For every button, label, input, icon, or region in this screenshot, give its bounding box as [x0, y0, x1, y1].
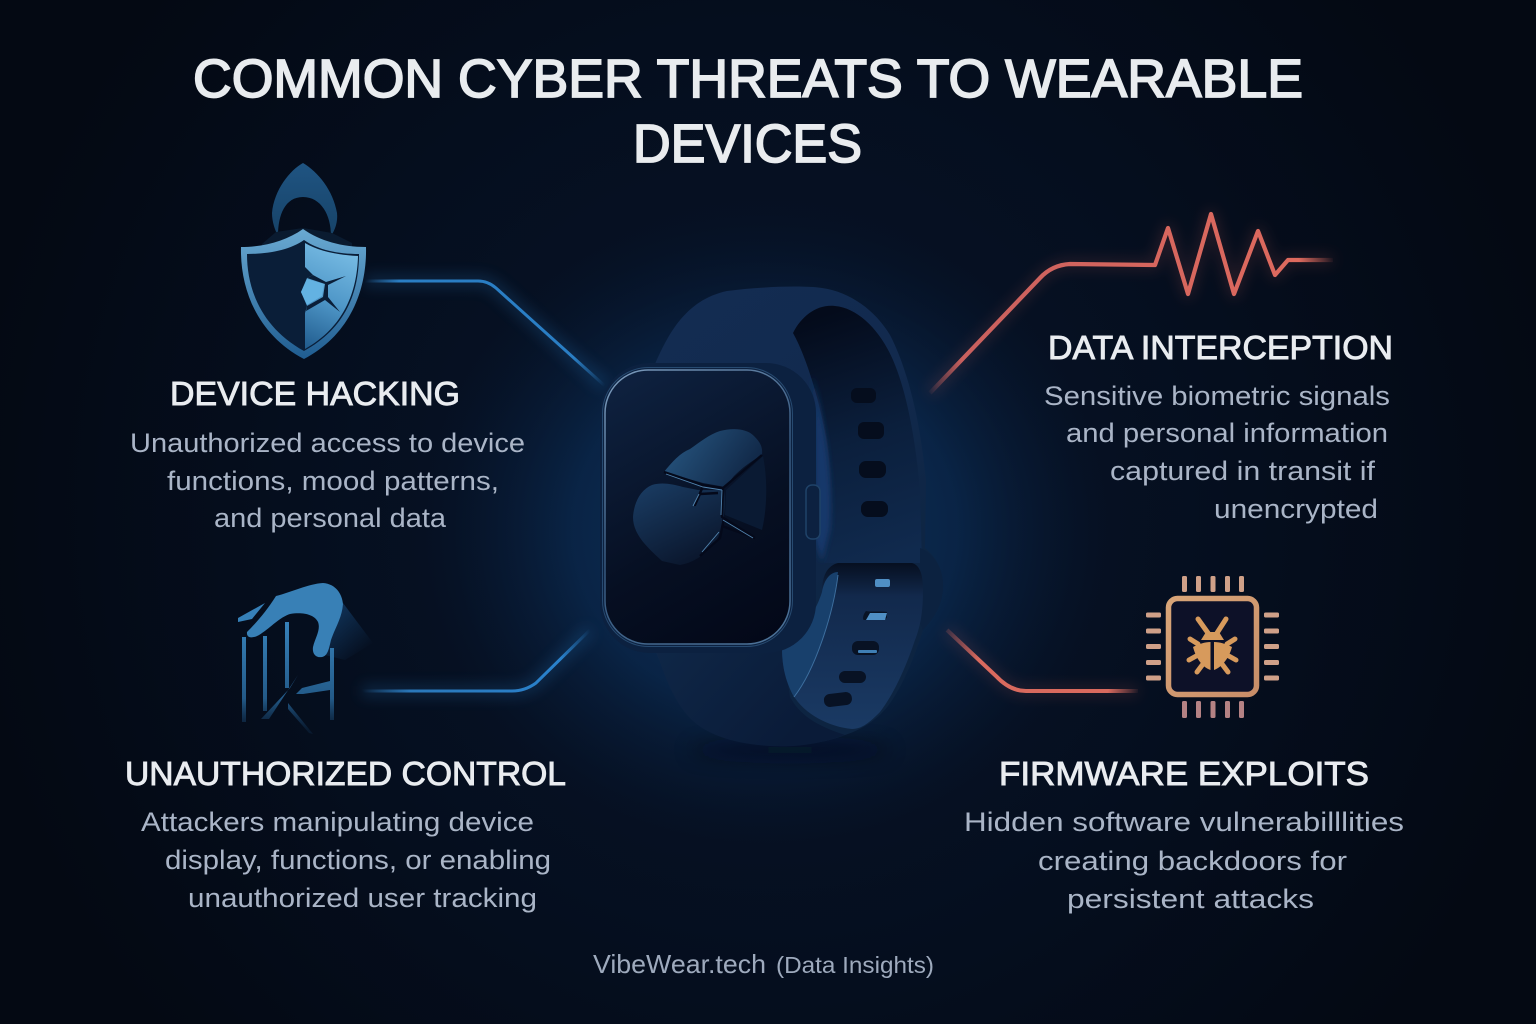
hand — [247, 583, 343, 657]
text: device hacking description — [130, 428, 525, 533]
text: data interception description: and personal information — [1066, 418, 1388, 448]
shield rim — [241, 229, 366, 359]
strap holes lower — [823, 579, 890, 708]
upper strap — [655, 287, 943, 746]
bug — [1189, 619, 1236, 672]
lower strap front — [782, 563, 923, 729]
heart right piece — [725, 456, 766, 530]
strings — [238, 603, 334, 734]
lower strap, left part — [655, 646, 845, 746]
cracks — [664, 455, 762, 556]
icon: hooded hacker and cracked shield — [241, 163, 366, 359]
heading: firmware exploits: FIRMWARE EXPLOITS — [999, 755, 1369, 792]
heading: unauthorized control: UNAUTHORIZED CONTROL — [125, 755, 566, 792]
inner strap shade — [793, 306, 922, 563]
heading: device hacking: DEVICE HACKING — [170, 375, 460, 412]
text: device hacking description: and personal data — [214, 503, 447, 533]
text: device hacking description: Unauthorized access to device — [130, 428, 525, 458]
crescent highlight beside case — [812, 375, 831, 562]
lit strip left of strap seam — [782, 572, 838, 697]
connector: data interception pulse line — [930, 214, 1333, 393]
title: DEVICES — [633, 114, 862, 174]
text: data interception description: captured in transit if — [1110, 456, 1376, 486]
right lug — [915, 548, 943, 630]
screen — [602, 368, 792, 646]
chip pins — [1146, 576, 1279, 718]
title: COMMON CYBER THREATS TO WEARABLE — [193, 49, 1303, 109]
text: firmware exploits description: Hidden software vulnerabilllities — [964, 807, 1404, 837]
footer credit — [593, 949, 934, 979]
text: unauthorized control description: display, functions, or enabling — [165, 845, 551, 875]
cracked heart on screen — [633, 429, 766, 565]
text: firmware exploits description — [964, 807, 1404, 914]
text: device hacking description: functions, mood patterns, — [167, 466, 499, 496]
icon: chip with bug — [1146, 576, 1279, 718]
strap holes upper — [851, 388, 888, 517]
text: firmware exploits description: creating backdoors for — [1038, 846, 1347, 876]
chip body — [1168, 598, 1256, 694]
shield light half — [301, 243, 358, 349]
text: unauthorized control description — [141, 807, 551, 913]
connector: unauthorized control to watch — [362, 630, 590, 691]
footer credit: (Data Insights) — [776, 952, 934, 978]
heart left lobe — [633, 484, 725, 565]
shoulders — [262, 228, 352, 252]
watch ground shadow — [690, 743, 890, 757]
heading: data interception: DATA INTERCEPTION — [1048, 329, 1393, 366]
text: unauthorized control description: unauthorized user tracking — [188, 883, 537, 913]
icon: hand pulling puppet strings — [238, 583, 373, 734]
hood — [272, 163, 337, 236]
footer credit: VibeWear.tech — [593, 949, 766, 979]
connector: firmware exploits to watch — [947, 630, 1138, 691]
watch — [600, 287, 943, 757]
hand shadow — [325, 603, 373, 660]
heart upper shard — [664, 429, 762, 487]
title — [193, 49, 1303, 174]
connector: device hacking to watch — [365, 281, 605, 386]
text: data interception description: Sensitive biometric signals — [1044, 381, 1390, 411]
side button — [806, 485, 820, 539]
text: data interception description — [1044, 381, 1390, 524]
shield crack — [301, 275, 346, 312]
shield dark half — [247, 240, 359, 351]
text: firmware exploits description: persistent attacks — [1067, 884, 1314, 914]
strap seam — [794, 575, 838, 697]
text: data interception description: unencrypted — [1214, 494, 1378, 524]
text: unauthorized control description: Attackers manipulating device — [141, 807, 534, 837]
case — [600, 363, 816, 653]
